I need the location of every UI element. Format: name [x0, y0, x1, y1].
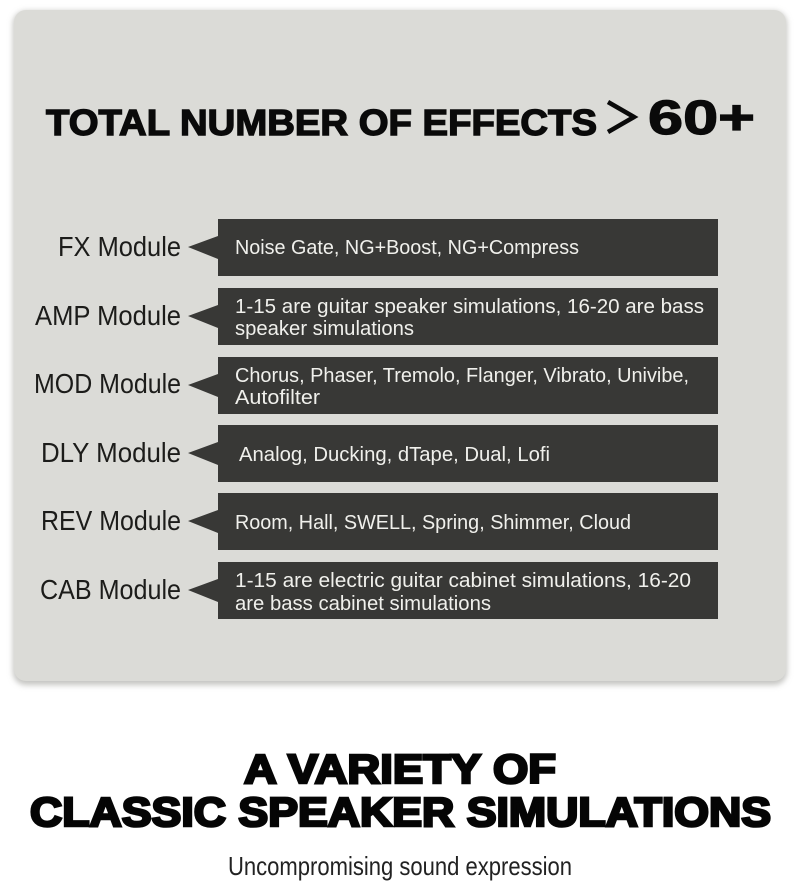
row: AMP module: speaker simulations — [235, 318, 414, 340]
row: MOD module — [34, 357, 718, 414]
title: total number of effects: TOTAL NUMBER OF EFFECTS — [46, 102, 597, 143]
heading: a variety of classic speaker simulations — [30, 746, 771, 835]
title: total number of effects — [46, 92, 755, 145]
effect count: 60+ — [648, 92, 755, 145]
row: CAB module: are bass cabinet simulations — [235, 593, 491, 615]
row: DLY module: DLY Module — [41, 437, 181, 468]
row: MOD module: Autofilter — [235, 387, 320, 409]
row: REV module — [41, 493, 718, 550]
row: CAB module: 1-15 are electric guitar cabinet simulations, 16-20 — [235, 570, 691, 592]
row: AMP module: 1-15 are guitar speaker simulations, 16-20 are bass — [235, 296, 704, 318]
heading: a variety of classic speaker simulations: CLASSIC SPEAKER SIMULATIONS — [30, 789, 771, 835]
subheading: Uncompromising sound expression — [228, 851, 572, 881]
row: CAB module — [40, 562, 718, 619]
row: AMP module: AMP Module — [35, 300, 181, 331]
icon: greater-than chevron — [608, 102, 634, 132]
row: DLY module — [41, 425, 718, 482]
panel: effects list — [13, 10, 787, 685]
row: MOD module: MOD Module — [34, 368, 181, 399]
row: FX module: Noise Gate, NG+Boost, NG+Compress — [235, 237, 579, 259]
row: REV module: REV Module — [41, 505, 181, 536]
row: AMP module — [35, 288, 718, 345]
row: DLY module: Analog, Ducking, dTape, Dual, Lofi — [239, 444, 550, 466]
row: REV module: Room, Hall, SWELL, Spring, Shimmer, Cloud — [235, 512, 631, 534]
row: FX module — [58, 219, 718, 276]
row: MOD module: Chorus, Phaser, Tremolo, Flanger, Vibrato, Univibe, — [235, 365, 689, 387]
row: CAB module: CAB Module — [40, 574, 181, 605]
row: FX module: FX Module — [58, 231, 181, 262]
heading: a variety of classic speaker simulations: A VARIETY OF — [244, 746, 556, 792]
